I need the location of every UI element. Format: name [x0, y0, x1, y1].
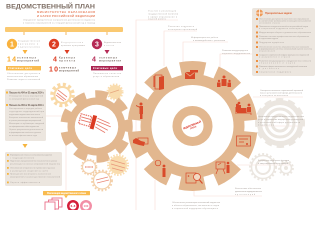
icon: certificate [236, 136, 250, 146]
icon: officer [136, 102, 143, 119]
centre label: ПЛАН [190, 125, 197, 130]
banner: bottom [43, 191, 90, 198]
panel: deadlines: на официальном сайте ведомства [9, 125, 40, 128]
step 1 column: основных [17, 56, 37, 60]
panel: priorities: образования [259, 50, 275, 52]
panel: priorities: Развитие сферы воспитания и молодёжной политики [259, 65, 308, 68]
panel: priorities: образования и науки [259, 62, 296, 64]
step 2 column: проекта [59, 60, 76, 62]
callout texts: ведомства [258, 124, 275, 126]
step 3 column: Повышение качества [93, 73, 122, 75]
panel: tasks: с подразделениями [10, 158, 35, 160]
step 3 column: 3 [95, 42, 99, 49]
icon: cross badge [256, 10, 263, 16]
step 1 column: подпрограммы [18, 46, 40, 48]
step 2 column: Крупных [59, 56, 76, 60]
callout texts: в сфере образования и [148, 16, 178, 18]
grey gear large [254, 97, 306, 149]
panel: deadlines: Контроль исполнения показателей [9, 116, 44, 119]
small gear: top left [52, 84, 73, 106]
intro text: и перечень мероприятий на текущий финансовый год и период [23, 22, 96, 25]
step 2 column: 2 [52, 42, 56, 49]
intro text [23, 20, 96, 25]
panel: priorities: Социальная поддержка [259, 72, 292, 74]
arrow [22, 144, 28, 148]
panel: priorities: и подготовки кадров [259, 38, 279, 40]
title: ВЕДОМСТВЕННЫЙ ПЛАН [6, 3, 96, 11]
panel: priorities: и сохранение кадрового потенциала [259, 28, 304, 30]
icon: document stack [45, 198, 62, 211]
icon: desk meeting [235, 104, 251, 115]
callout texts: Совершенствование нормативной правовой [260, 89, 304, 92]
step 2 column: 10 [49, 66, 58, 74]
step 1 column: Ключевые цели [8, 67, 32, 70]
step 2 column [49, 39, 86, 74]
panel: priorities: экономики страны [259, 22, 280, 24]
callout texts: Финансовое обеспечение [235, 187, 262, 190]
callout texts [148, 10, 305, 210]
step 1 column: качественного образования [7, 76, 38, 78]
panel: deadlines: и сроков реализации мероприятий [9, 119, 42, 122]
panel: tasks [5, 152, 62, 186]
panel: priorities: Обеспечение качества образовательных программ [259, 46, 310, 48]
callout texts: и взаимодействие с регионами [193, 39, 226, 42]
icon: person at panel [236, 102, 241, 113]
panel: priorities: Обеспечение доступности качественного образования [259, 18, 309, 20]
small gear: bottom centre [92, 170, 112, 190]
step 2 column: целевые программы [61, 45, 86, 47]
icon: envelope [185, 70, 198, 79]
step 1 column: Развитие науки и технологий [7, 78, 41, 81]
callout texts: деятельности подведомственных [235, 191, 263, 193]
panel: priorities: Поддержка одарённых [259, 42, 285, 44]
subtitle: И НАУКИ РОССИЙСКОЙ ФЕДЕРАЦИИ [37, 14, 95, 18]
panel: deadlines: подготовке ведомственного плана [9, 114, 41, 116]
callout texts: Развитие кадрового [168, 26, 195, 28]
subtitle: МИНИСТЕРСТВА ОБРАЗОВАНИЯ [37, 10, 95, 14]
step 3 column: услуг в образовании [93, 76, 120, 78]
panel: priorities: Создание современной инфраструктуры исследований [259, 54, 310, 56]
small gear: bottom left [82, 160, 96, 174]
step 1 column: мероприятий [17, 60, 39, 62]
callout texts: и контроль исполнения [260, 95, 288, 97]
panel: priorities: Развитие системы профессионального образования [259, 35, 309, 38]
step 3 column: Ведомственные [104, 42, 122, 44]
callout texts: услуг и управление имуществом учреждений [258, 118, 304, 121]
callout texts: Обеспечение реализации полномочий ведомства [172, 201, 221, 204]
small gear: bottom right cream [108, 155, 128, 175]
step 3 column: 4 [92, 56, 96, 64]
panel: deadlines: и формирование отчётных данных [9, 131, 42, 134]
icon: door [154, 75, 164, 90]
panel: deadlines: Письмо № 484 от 31 марта 2014 г. [9, 92, 44, 94]
callout texts: Контрольно-надзорные функции [258, 159, 290, 162]
step 3 column: планы [104, 45, 114, 47]
panel: priorities: в регионах [259, 68, 280, 70]
grey gear medium [250, 154, 276, 180]
callout texts: в области образования, воспитания и науки [172, 205, 220, 207]
panel: deadlines: Письмо № 484 от 31 марта 2014 г. [9, 104, 44, 107]
centre label: ВЕДОМСТВЕННЫЙ [183, 120, 202, 130]
callout texts: научного сотрудничества [222, 53, 251, 55]
icon: pink circle: 100 [84, 204, 89, 208]
orange timeline bar [5, 27, 123, 35]
icon: red circle: 6–6 [71, 204, 76, 208]
panel: tasks: Подготовка предложений по показателям и срокам [10, 160, 58, 162]
step 3 column: основных [99, 56, 118, 60]
callout texts: в установленной сфере деятельности [258, 121, 301, 124]
icon: magnifier on document [186, 173, 202, 184]
panel: deadlines: на очередной финансовый год [9, 98, 40, 100]
step 1 column: Обеспечение доступности [7, 73, 41, 75]
panel: deadlines: по итогам финансового года [9, 134, 38, 137]
panel: priorities: Повышение конкурентоспособности российской науки [259, 25, 309, 28]
icon: handshake [133, 138, 148, 146]
main central gear [133, 68, 251, 184]
step 1 column: 14 [7, 56, 16, 64]
step 2 column: 4 [53, 56, 57, 64]
intro text: Определяет приоритетные направления деятельности ведомства [23, 20, 96, 22]
panel: tasks: Обеспечение открытости и публичности данных [10, 168, 56, 170]
callout texts: организаций [235, 193, 256, 196]
callout texts: Информационная работа [191, 36, 219, 39]
panel: tasks: мероприятий и анализ достижения показателей [10, 176, 61, 178]
panel: tasks: Проведение мониторинга выполнения [10, 174, 51, 176]
icon: presenter [216, 162, 230, 174]
panel: priorities: Развитие международного сотрудничества в области [259, 60, 312, 62]
panel: deadlines: Мониторинг и публикация сведений [9, 122, 45, 125]
callout texts: базы в установленной сфере деятельности [260, 92, 303, 94]
callout texts: Организация предоставления государственных [258, 116, 305, 118]
panel: deadlines [5, 89, 46, 141]
subtitle [37, 10, 95, 18]
step 1 column: 1 [10, 42, 14, 49]
panel: deadlines: структурных подразделений при [9, 110, 45, 113]
panel: priorities: и соответствие требованиям инновационного развития [259, 20, 311, 22]
callout texts: Развитие международного [222, 50, 249, 52]
step 3 column: Ключевые цели [93, 67, 117, 70]
panel: priorities: Приоритетные задачи [265, 11, 292, 15]
panel: tasks: и размещение сведений на сайте [10, 170, 49, 172]
step 3 column [91, 39, 123, 78]
grey gear small [279, 161, 293, 175]
icon: hand with document [78, 112, 113, 134]
icon: people [217, 76, 231, 87]
step 3 column: мероприятия [99, 60, 122, 62]
callout texts: государственной политики [148, 12, 179, 16]
small gear: top right [108, 84, 122, 100]
icon: pink circle [80, 200, 92, 212]
callout texts: Участие в реализации [148, 10, 177, 12]
main left gear [60, 90, 133, 163]
step 2 column: ключевых [59, 66, 77, 70]
step 1 column: Государственные [18, 40, 41, 42]
panel: priorities: и разработок в стране [259, 56, 291, 58]
panel: tasks: Формирование плана и согласование разделов [10, 154, 53, 156]
panel: priorities: Модернизация общего и дошкольного образования [259, 32, 311, 34]
icon: person with board [155, 160, 166, 177]
banner: bottom: Реализация ведомственного плана [47, 192, 87, 195]
panel: tasks: Оценка эффективности [10, 181, 41, 184]
panel: deadlines: Оценка результатов деятельности [9, 129, 44, 131]
panel: priorities [252, 8, 315, 76]
icon: red circle [67, 200, 79, 212]
panel: deadlines: Распоряжение о порядке работы [9, 108, 42, 110]
step 1 column: программы и [18, 44, 39, 46]
callout texts: научной работы [148, 18, 166, 20]
panel: deadlines: Утверждение плана мероприятий [9, 94, 44, 98]
panel: priorities: и формирование системы независимой оценки качества [259, 48, 313, 50]
callout texts: и социальной поддержки обучающихся [172, 207, 218, 210]
callout texts: и лицензирование организаций [258, 162, 289, 165]
step 1 column [6, 39, 41, 81]
step 2 column: мероприятий [59, 70, 79, 72]
callout texts: потенциала организаций [168, 28, 198, 31]
step 2 column: Федеральные [61, 41, 84, 44]
panel: tasks: реализации основных мероприятий ведомства [10, 162, 61, 166]
